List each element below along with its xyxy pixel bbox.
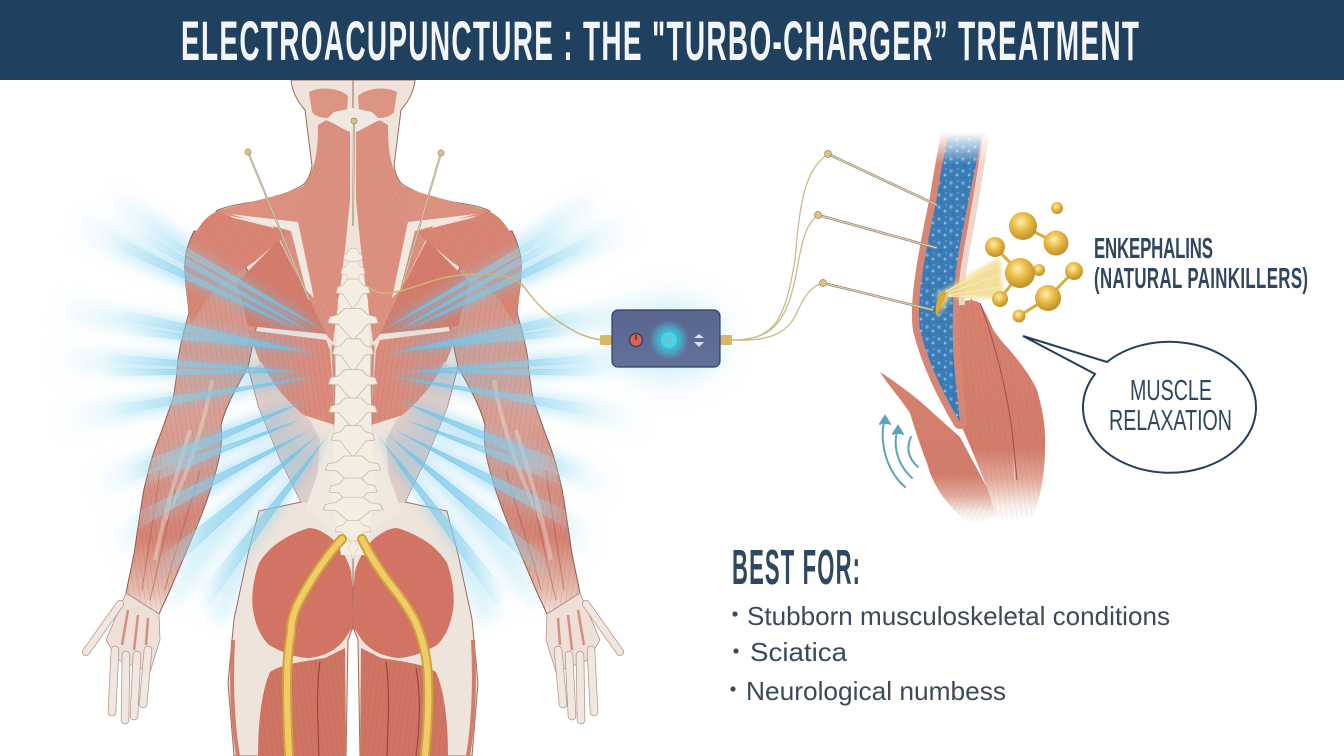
dark gaps beside the spine: [333, 345, 373, 430]
spine: [323, 248, 383, 559]
enkephalin release burst: [936, 258, 1003, 318]
adjust arrows: [694, 334, 704, 347]
top fade: [915, 118, 1005, 164]
sciatic nerves: [287, 539, 428, 756]
acupuncture needles on back: [245, 118, 444, 300]
title: ELECTROACUPUNCTURE : THE "TURBO-CHARGER” TREATMENT: [181, 11, 1139, 73]
device body: [612, 310, 720, 367]
muscle and nerve cross-section: [814, 118, 1045, 523]
wires from back to device: [369, 274, 605, 340]
muscle separation line: [980, 303, 1017, 480]
blue energy rays, left: [100, 226, 326, 604]
speech bubble: muscle relaxation: RELAXATION: [1109, 405, 1232, 437]
enkephalins label: [1094, 234, 1308, 295]
nerve pale wall: [962, 135, 986, 305]
best for list: Stubborn musculoskeletal conditions: [747, 601, 1170, 631]
lower back tendon: [305, 433, 401, 550]
neck tendons: [326, 108, 380, 132]
speech bubble: muscle relaxation: MUSCLE: [1130, 375, 1212, 407]
outer right muscle: [970, 297, 1045, 520]
title bar: [0, 0, 1344, 80]
needles into nerve: [814, 150, 937, 310]
motion arcs: [880, 416, 918, 487]
blue nerve core: [919, 135, 982, 422]
far blue glow behind the figure, left: [50, 190, 300, 625]
human back anatomy figure: [86, 80, 620, 756]
lower left muscle: [880, 372, 1000, 523]
enkephalins label: ENKEPHALINS: [1094, 234, 1213, 265]
spinal column: [332, 250, 374, 555]
far blue glow behind the figure, right: [406, 190, 656, 625]
speech bubble: muscle relaxation: [1023, 336, 1256, 473]
enkephalins label: (NATURAL PAINKILLERS): [1094, 264, 1308, 295]
best for heading: BEST FOR:: [732, 541, 860, 596]
right half of body: [353, 80, 620, 756]
centre line of back: [350, 130, 356, 265]
blue energy rays, right: [380, 226, 606, 604]
best for list: Sciatica: [750, 637, 848, 667]
enkephalin molecules: [985, 202, 1083, 322]
glowing light: [649, 320, 689, 360]
left half of body: [86, 80, 353, 756]
power dial: [630, 334, 642, 346]
best for list: Neurological numbess: [746, 676, 1006, 706]
main muscle: [952, 300, 1017, 520]
best for list: [730, 601, 1170, 706]
device connectors: [600, 335, 612, 345]
wires from device to needles: [732, 154, 828, 340]
stimulator device: [600, 310, 732, 367]
nerve outer sheath: [919, 135, 982, 422]
device glow: [612, 300, 724, 380]
